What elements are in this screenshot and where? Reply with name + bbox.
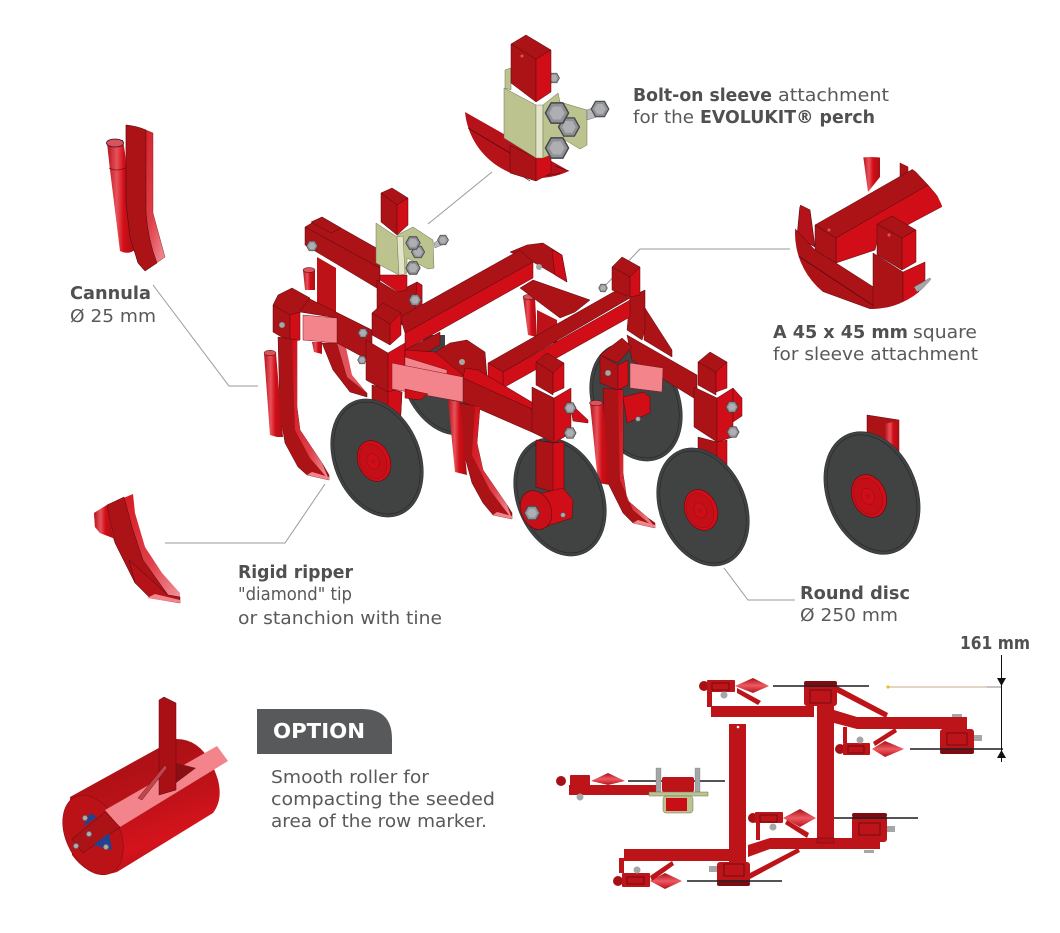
main machine [264,188,766,580]
top view diagram [556,678,1003,889]
text: round disc [800,584,910,626]
bolts [587,106,600,120]
heading: bolt-on sleeve: Bolt-on sleeve [633,86,772,106]
dimension: 161 mm [886,633,1030,762]
lower post [510,145,536,181]
heading: bolt-on sleeve [633,86,889,128]
text: cannula: Cannula [70,284,151,304]
option tab: OPTION [273,719,365,743]
back discs [573,329,699,475]
inset: square attachment [795,157,942,309]
disc: front center and leg [497,424,623,570]
option tab [257,709,392,754]
center row [392,340,550,519]
text: option description: area of the row marker. [271,812,487,832]
rear center parts [523,294,588,423]
text: square attachment: square [913,323,977,343]
pink arm [105,746,228,827]
text: square attachment [773,323,978,365]
heading: bolt-on sleeve: for the [633,108,694,128]
text: option description: compacting the seeded [271,790,495,810]
text: option description [271,768,495,832]
text: rigid ripper: "diamond" tip [238,585,352,605]
heading: bolt-on sleeve: attachment [778,86,889,106]
ripper: right [835,727,904,757]
text: square attachment: for sleeve attachment [773,345,978,365]
base plate arc [465,112,569,178]
post with khaki sleeve [376,188,448,325]
lower frame [624,724,918,886]
text: option description: Smooth roller for [271,768,430,788]
inset: bolt-on sleeve [465,35,609,181]
left assembly with khaki sleeve [556,768,725,813]
text: rigid ripper [238,563,442,629]
dimension: 161 mm: 161 mm [960,633,1030,654]
text: rigid ripper: or stanchion with tine [238,609,442,629]
front left row [264,288,372,480]
post [511,35,551,59]
text: rigid ripper: Rigid ripper [238,563,353,583]
right box [940,729,974,753]
text: cannula [70,284,156,327]
inset: cannula [106,125,165,271]
inset: rigid ripper [94,494,180,603]
top frame [711,681,1003,843]
right row [590,335,697,528]
front left post [366,303,405,430]
text: round disc: Ø 250 mm [800,606,898,626]
icon: roller [51,697,228,884]
frame beams [400,243,672,388]
end plate [72,812,120,853]
callout lines [153,172,795,600]
blue brackets [83,813,97,827]
ripper: lower left [613,858,682,889]
rear left row [303,217,380,397]
cannula blade [126,125,165,271]
front right post and disc [640,352,766,580]
ripper: top [699,678,769,707]
khaki sleeve [504,88,536,158]
text: square attachment: A 45 x 45 mm [773,323,908,343]
inset: round disc [806,415,938,569]
front center post [532,353,576,443]
sleeve back [505,68,511,90]
text: cannula: Ø 25 mm [70,307,156,327]
disc: front left [314,385,440,531]
roller body [70,739,220,874]
strut [176,763,196,783]
ripper: middle [748,809,816,840]
heading: bolt-on sleeve: EVOLUKIT® perch [700,108,875,128]
text: round disc: Round disc [800,584,910,604]
cannula tube [107,140,135,253]
